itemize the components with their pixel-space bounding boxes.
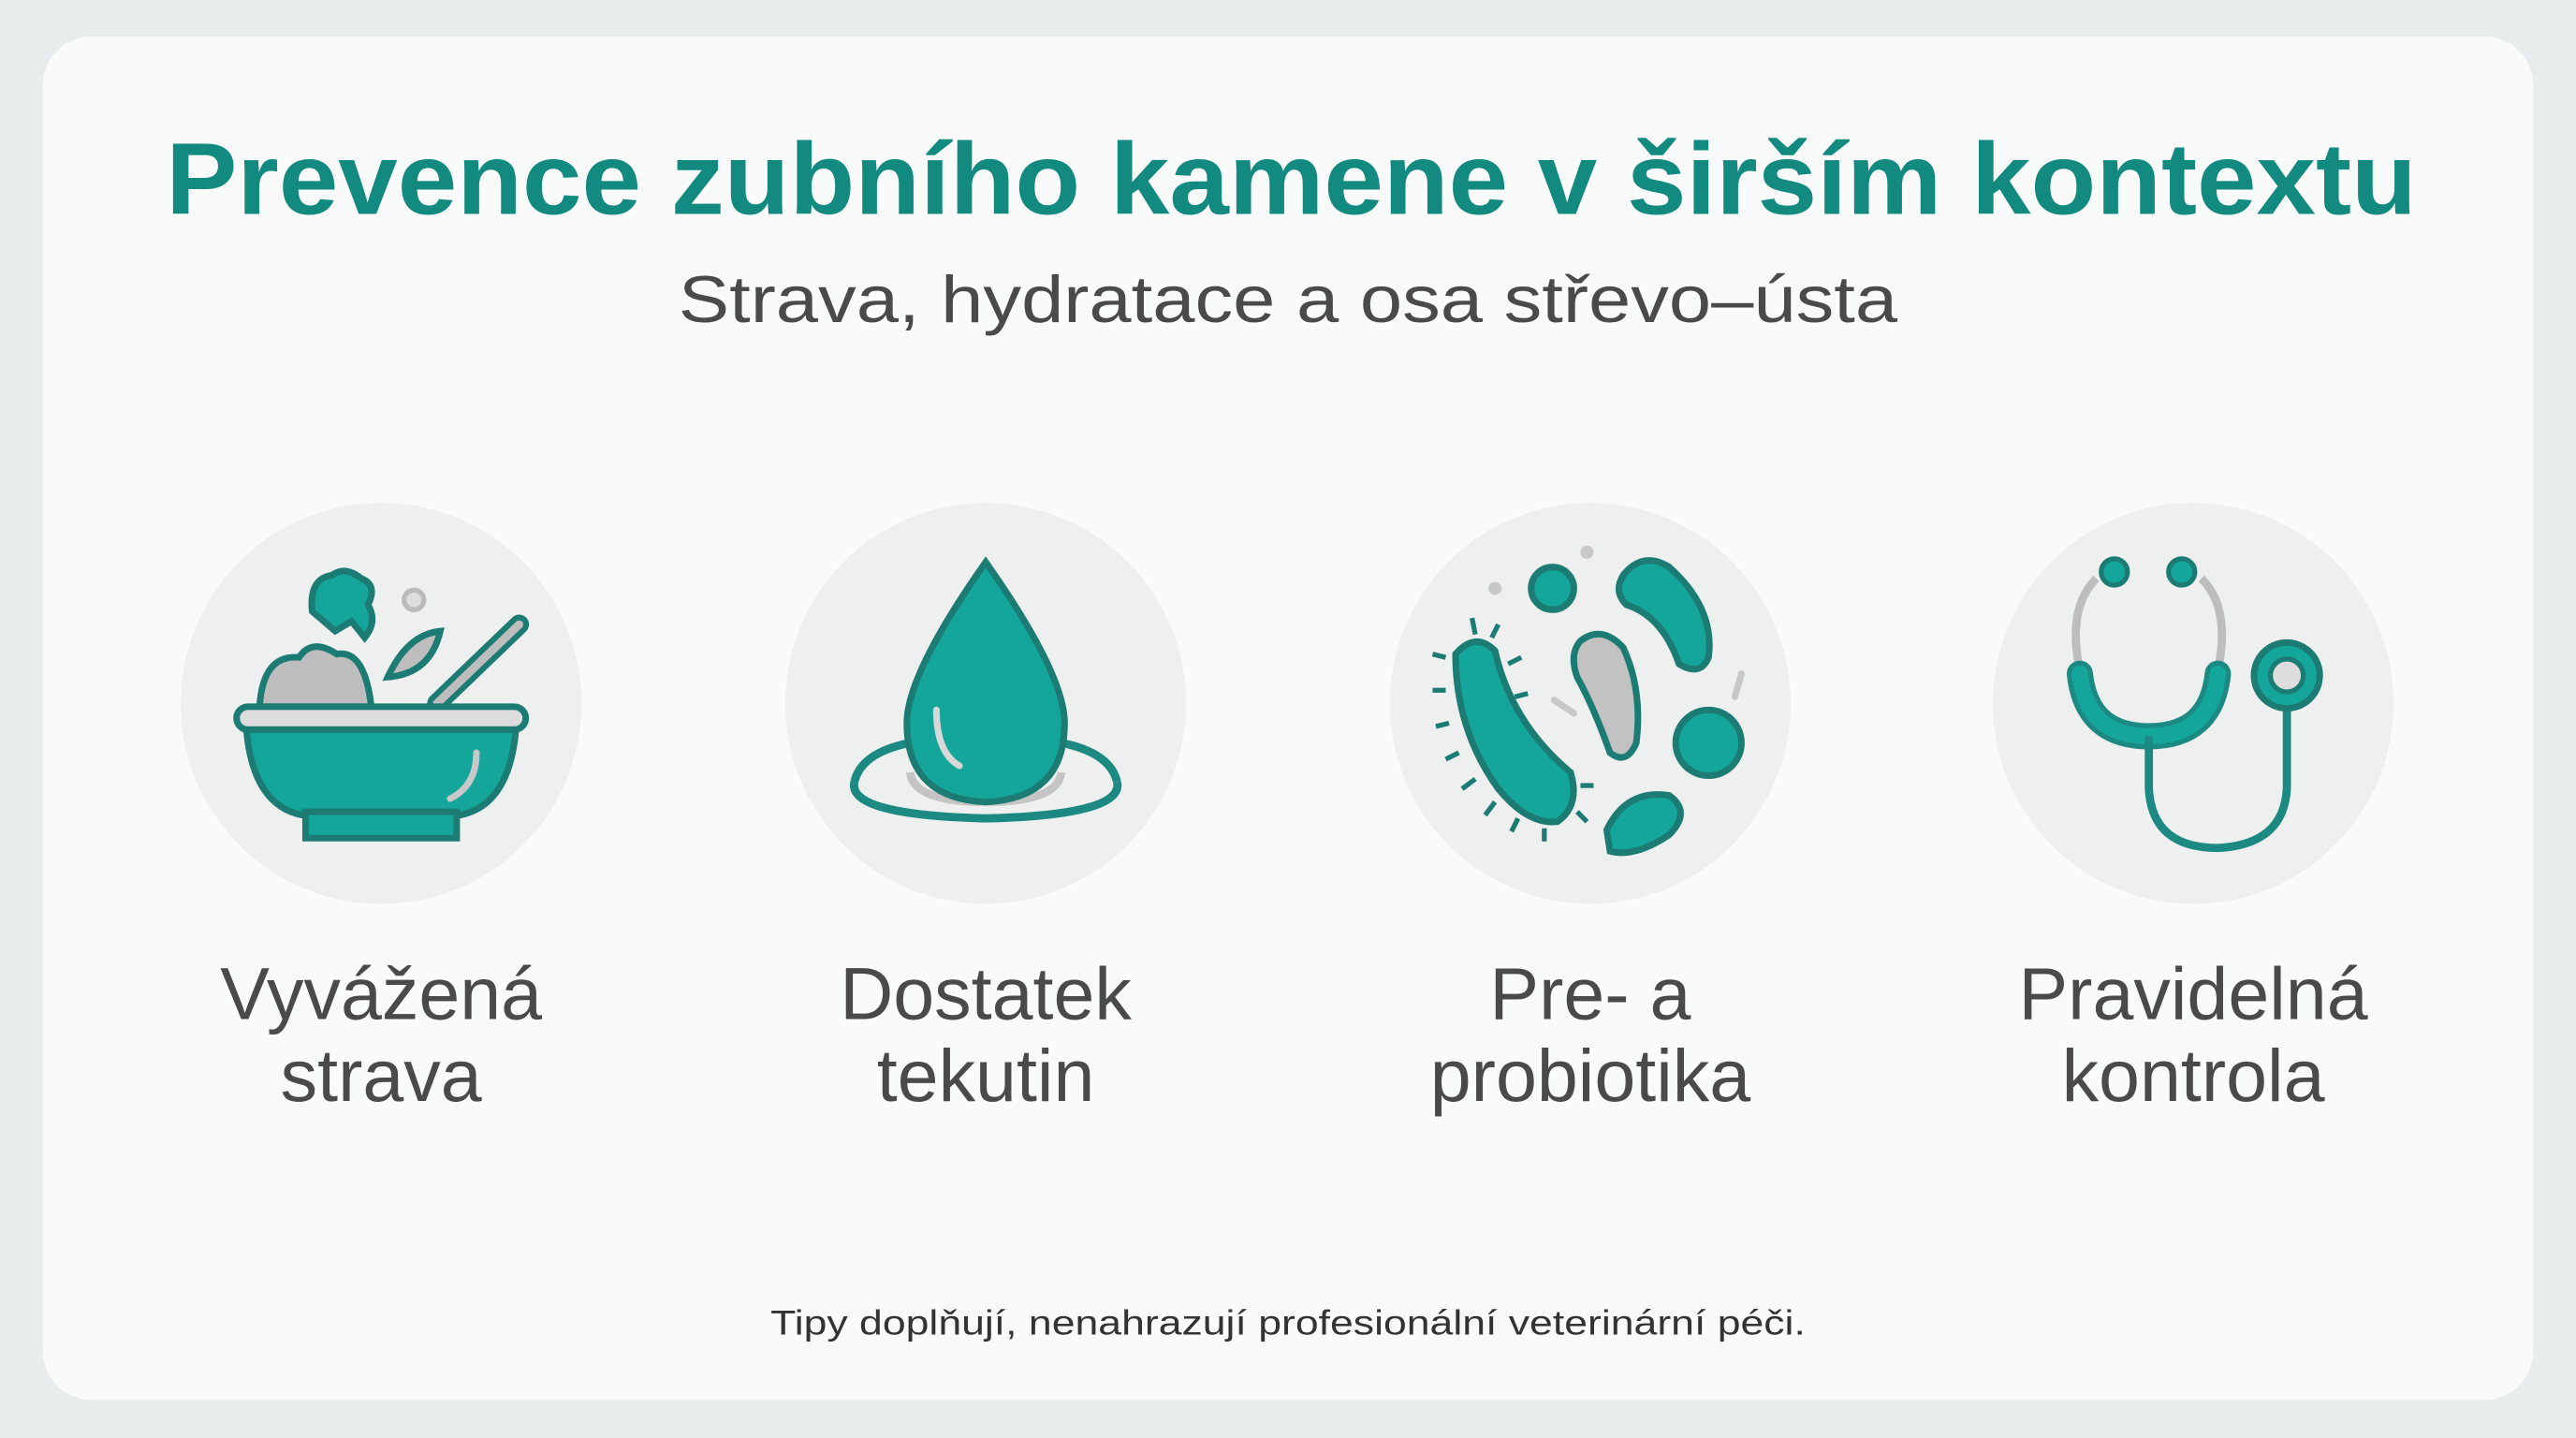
icon: bacteria xyxy=(1390,503,1791,903)
label: Pravidelná kontrola: Pravidelná xyxy=(2018,952,2368,1034)
subtitle: Strava, hydratace a osa střevo–ústa xyxy=(679,262,1898,336)
footer note: Tipy doplňují, nenahrazují profesionální veterinární péči. xyxy=(770,1303,1806,1342)
label: Pre- a probiotika xyxy=(1430,952,1750,1117)
label: Vyvážená strava: Vyvážená xyxy=(220,952,542,1034)
label: Vyvážená strava: strava xyxy=(281,1034,482,1117)
label: Pravidelná kontrola: kontrola xyxy=(2062,1034,2325,1117)
icon: water drop xyxy=(785,503,1186,903)
label: Dostatek tekutin xyxy=(840,952,1132,1117)
label: Pre- a probiotika: Pre- a xyxy=(1489,952,1691,1034)
label: Dostatek tekutin: Dostatek xyxy=(840,952,1132,1034)
icon: bowl xyxy=(181,503,581,903)
icon: stethoscope xyxy=(1993,503,2393,903)
label: Vyvážená strava xyxy=(220,952,542,1117)
label: Dostatek tekutin: tekutin xyxy=(877,1034,1094,1117)
label: Pre- a probiotika: probiotika xyxy=(1430,1034,1750,1117)
label: Pravidelná kontrola xyxy=(2018,952,2368,1117)
title: Prevence zubního kamene v širším kontextu xyxy=(166,122,2417,236)
